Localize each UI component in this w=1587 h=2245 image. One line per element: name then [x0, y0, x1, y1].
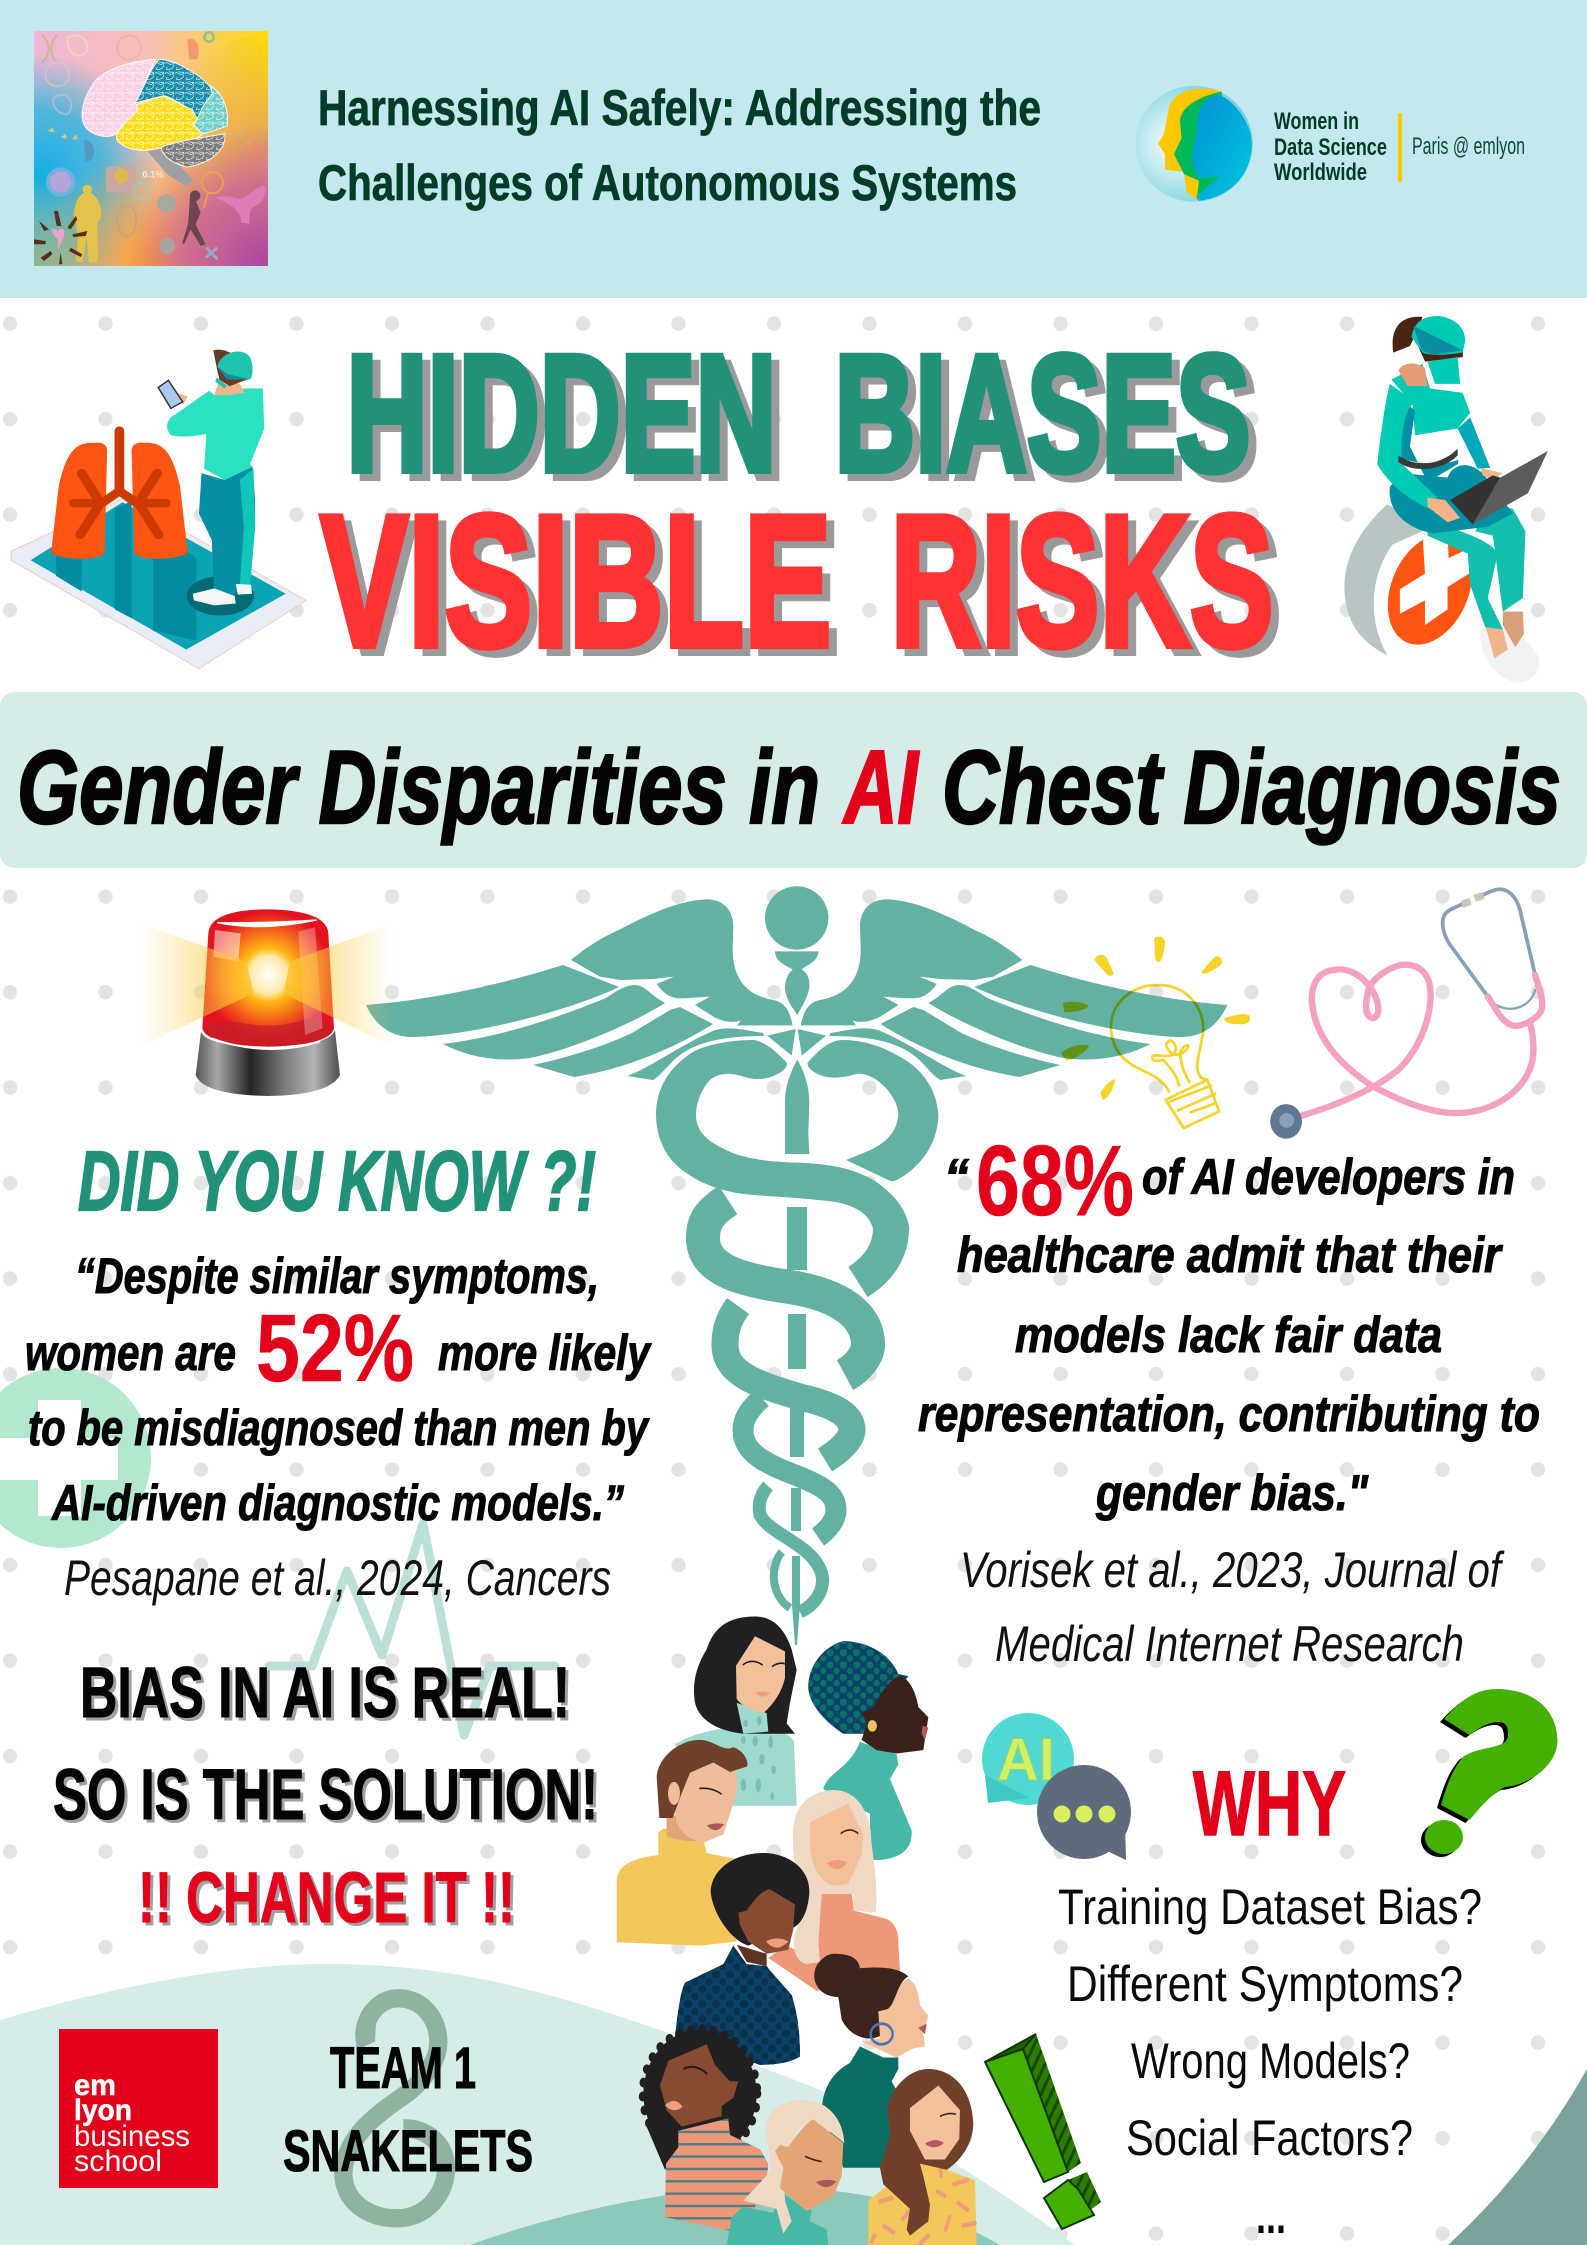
main title: Visible Risks: RISKS: [898, 484, 1282, 692]
why list: Social Factors?: [1126, 2110, 1413, 2166]
quote: women misdiagnosed: [25, 1248, 652, 1531]
main title: Hidden Biases: HIDDEN: [346, 322, 776, 506]
icon: snake outline: [343, 1998, 446, 2218]
quote: AI developers: 68%: [976, 1125, 1134, 1237]
bottom teal arc: [470, 2187, 1000, 2245]
call to action: BIAS IN AI IS REAL!: [83, 1657, 573, 1736]
logo: emlyon business school: school: [74, 2145, 162, 2178]
person: curly hair: [643, 2029, 768, 2234]
header band: [0, 0, 1587, 298]
quote: AI developers: models lack fair data: [1015, 1307, 1442, 1363]
heading: did you know: DID YOU KNOW ?!: [78, 1134, 596, 1228]
quote: AI developers: “: [944, 1149, 969, 1205]
citation: Vorisek: Medical Internet Research: [995, 1616, 1464, 1672]
illustration: nurse with laptop: [1344, 316, 1548, 683]
icon: green medical plus: [0, 1368, 151, 1548]
person: blonde: [768, 1790, 900, 1991]
subtitle band: AI: [842, 730, 919, 846]
subtitle band: Gender Disparities in: [17, 730, 820, 846]
logo: Women in Data Science: [1135, 86, 1525, 202]
quote: AI developers: [918, 1125, 1540, 1521]
team name: [283, 2036, 533, 2184]
person: black bob: [675, 1616, 797, 1806]
person: head wrap: [808, 1641, 928, 1860]
why list: Wrong Models?: [1131, 2033, 1410, 2089]
quote: women misdiagnosed: 52%: [256, 1295, 414, 1402]
icon: AI chat bubbles: AI: [997, 1726, 1055, 1793]
person: afro: [675, 1853, 809, 2065]
people group: [617, 1616, 977, 2245]
main title: Hidden Biases: BIASES: [842, 328, 1258, 514]
illustration: doctor on phone with lungs: [11, 350, 306, 669]
quote: AI developers: gender bias.": [1095, 1465, 1369, 1521]
person: man in yellow: [617, 1740, 748, 1946]
heading: why: WHY: [1193, 1753, 1346, 1855]
logo: Women in Data Science: Data Science: [1274, 134, 1387, 161]
why list: Training Dataset Bias?: [1058, 1879, 1482, 1935]
main title: Hidden Biases: HIDDEN: [354, 328, 784, 514]
quote: women misdiagnosed: to be misdiagnosed than men by: [28, 1400, 650, 1456]
main title: Visible Risks: RISKS: [890, 476, 1274, 686]
person: long brown hair: [868, 2069, 977, 2245]
subtitle band: [0, 692, 1587, 868]
logo: Women in Data Science: Paris @ emlyon: [1412, 133, 1525, 160]
logo: Women in Data Science: Worldwide: [1274, 159, 1367, 186]
header title: [318, 80, 1041, 211]
header title: Challenges of Autonomous Systems: [318, 155, 1017, 211]
logo: emlyon business school: lyon: [74, 2094, 132, 2127]
quote: AI developers: of AI developers in: [1142, 1149, 1515, 1205]
icon: green question mark: [1421, 1689, 1558, 1857]
why list: [1058, 1879, 1482, 2244]
icon: ECG line: [269, 1524, 555, 1735]
icon: light bulb: [1061, 937, 1250, 1128]
bottom-right corner: [1448, 2069, 1587, 2245]
call to action: [53, 1654, 601, 1941]
team name: SNAKELETS: [283, 2119, 533, 2184]
brain artwork: [34, 31, 268, 266]
brain artwork: 0.1%: [142, 170, 164, 180]
quote: women misdiagnosed: women are: [25, 1325, 236, 1381]
call to action: !! CHANGE IT !!: [138, 1859, 515, 1938]
logo: emlyon business school: em: [74, 2069, 116, 2102]
icon: alarm siren: [140, 909, 393, 1096]
header title: Harnessing AI Safely: Addressing the: [318, 80, 1041, 136]
main title: Visible Risks: VISIBLE: [320, 476, 832, 686]
person: pale hair: [727, 2100, 844, 2245]
caduceus: [366, 886, 1227, 1645]
icon: green exclamation mark: [985, 2034, 1101, 2229]
main title: Hidden Biases: [346, 322, 1258, 514]
person: bun and earring: [814, 1954, 928, 2168]
quote: women misdiagnosed: AI-driven diagnostic models.”: [50, 1475, 624, 1531]
why list: ...: [1256, 2188, 1286, 2244]
why list: Different Symptoms?: [1067, 1956, 1463, 2012]
citation: Vorisek: [960, 1542, 1505, 1672]
call to action: !! CHANGE IT !!: [141, 1862, 518, 1941]
call to action: BIAS IN AI IS REAL!: [80, 1654, 570, 1733]
main title: Visible Risks: VISIBLE: [328, 484, 840, 692]
icon: AI chat bubbles: [982, 1713, 1131, 1860]
main title: Hidden Biases: BIASES: [834, 322, 1250, 506]
citation: Pesapane: Pesapane et al., 2024, Cancers: [64, 1550, 611, 1606]
team name: TEAM 1: [330, 2036, 476, 2101]
quote: AI developers: healthcare admit that their: [957, 1227, 1503, 1283]
quote: women misdiagnosed: more likely: [438, 1325, 652, 1381]
call to action: SO IS THE SOLUTION!: [53, 1756, 598, 1835]
call to action: SO IS THE SOLUTION!: [56, 1759, 601, 1838]
logo: Women in Data Science: Women in: [1274, 108, 1359, 135]
quote: women misdiagnosed: “Despite similar symptoms,: [75, 1248, 599, 1304]
logo: emlyon business school: [59, 2029, 218, 2188]
logo: emlyon business school: business: [74, 2120, 190, 2153]
bottom-left pale arc: [0, 1964, 1075, 2245]
icon: stethoscope: [1270, 889, 1542, 1139]
